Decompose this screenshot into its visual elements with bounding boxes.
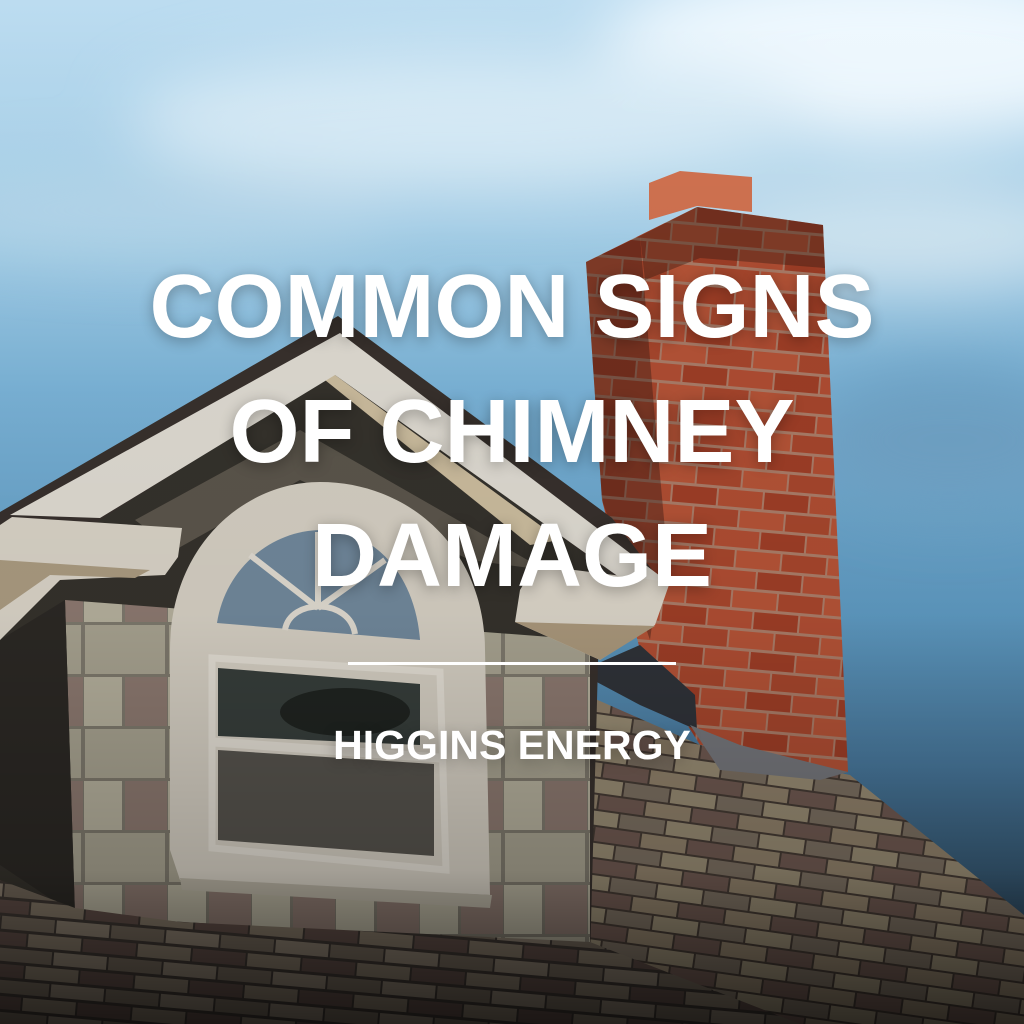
chimney brick body (586, 207, 848, 772)
arched window surround (170, 482, 490, 895)
window sill (180, 878, 492, 908)
dormer stone wall (65, 600, 590, 948)
brand name: HIGGINS ENERGY (333, 722, 691, 768)
dormer upper gable shingles (135, 430, 545, 570)
dormer (0, 316, 670, 1000)
chimney shaded left side (586, 236, 665, 640)
arched window glass (217, 530, 420, 640)
clouds (0, 0, 1024, 510)
window frame (212, 658, 446, 870)
tree reflection (280, 688, 410, 736)
foreground roof slates (0, 880, 800, 1024)
left eave return (0, 517, 182, 640)
upper sash (218, 668, 420, 745)
title: COMMON SIGNS (149, 257, 874, 357)
chimney terracotta cap (649, 171, 752, 220)
lower sash blind (218, 750, 434, 856)
title (146, 257, 878, 606)
white gable fascia (10, 333, 668, 592)
arched window muntins (250, 532, 385, 634)
chimney shaded upper band (640, 207, 825, 280)
roof edge behind gable (0, 316, 660, 1000)
flashing at chimney base (578, 645, 848, 780)
soffit strip (320, 375, 560, 545)
right eave return (515, 565, 670, 660)
lower roof slates (575, 690, 1024, 1024)
dormer shadow side wall (0, 600, 75, 915)
chimney (586, 171, 848, 772)
dormer dark shingled gable (0, 370, 640, 945)
divider line (348, 662, 676, 665)
title: OF CHIMNEY (229, 382, 794, 482)
title: DAMAGE (312, 506, 712, 606)
meeting rail (214, 742, 440, 758)
